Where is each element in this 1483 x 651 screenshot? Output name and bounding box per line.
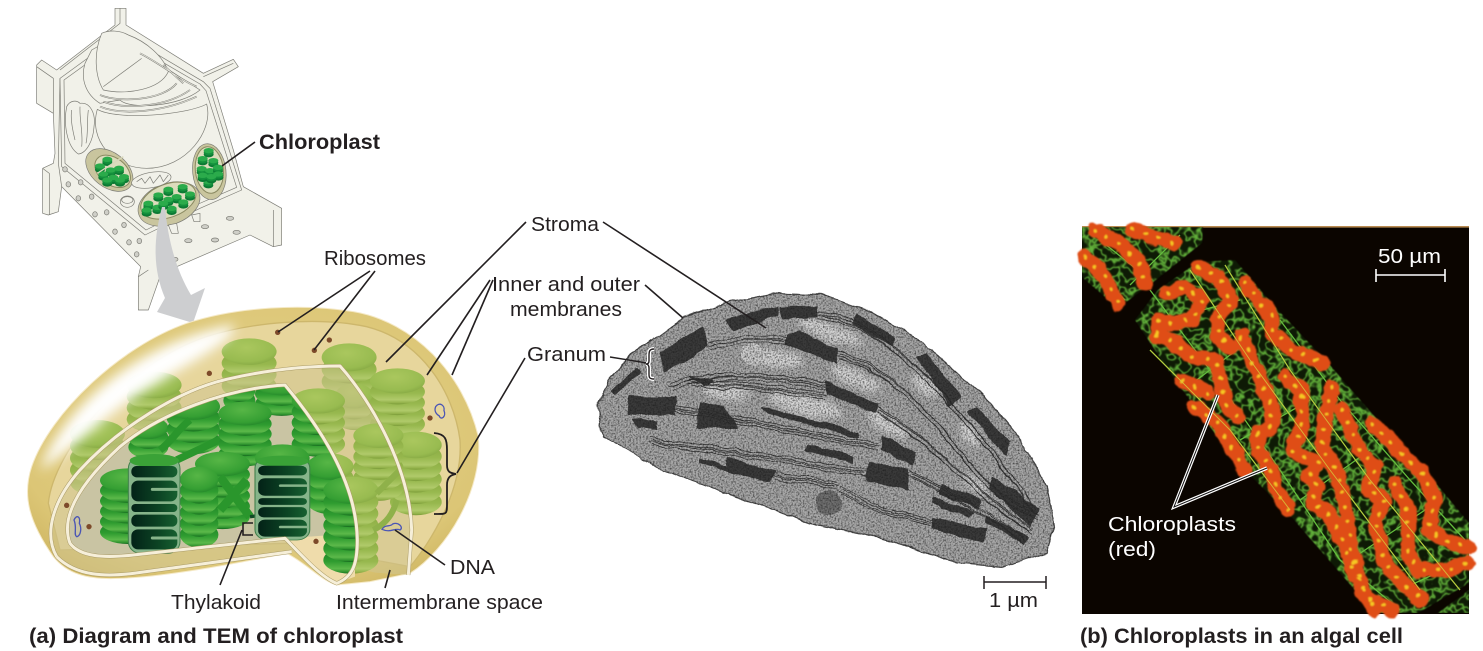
50 um scale bar bbox=[1376, 269, 1445, 282]
arrow: zoom into chloroplast bbox=[156, 207, 205, 323]
intermembrane space region bbox=[51, 366, 412, 575]
TEM body bbox=[597, 293, 1055, 567]
label: Stroma: Stroma bbox=[531, 213, 600, 236]
micrograph: TEM of chloroplast bbox=[597, 293, 1055, 567]
membrane bands bbox=[51, 366, 412, 583]
label: Chloroplasts (red): (red) bbox=[1108, 538, 1156, 561]
plasmodesmata bbox=[63, 167, 240, 261]
callout lines: chloroplasts bbox=[1174, 395, 1267, 507]
cut wedge wall bbox=[285, 533, 355, 583]
label: 50 um: 50 µm bbox=[1378, 245, 1441, 268]
1 um scale bar bbox=[984, 576, 1046, 589]
ribosomes bbox=[64, 330, 433, 544]
label: Thylakoid: Thylakoid bbox=[171, 591, 261, 614]
stroma bbox=[48, 321, 460, 567]
grana bbox=[613, 307, 1038, 542]
chloroplast right in cell bbox=[190, 142, 229, 201]
cut thylakoid stack left bbox=[128, 454, 180, 553]
label: Chloroplasts (red) bbox=[1108, 513, 1236, 561]
caption a: (a) Diagram and TEM of chloroplast bbox=[29, 625, 403, 648]
diagram: chloroplast cutaway bbox=[28, 307, 479, 585]
red chloroplast ribbons bbox=[1085, 230, 1468, 610]
label: Inner and outer membranes: Inner and outer bbox=[492, 273, 640, 296]
filaments crossing ribbons bbox=[1150, 265, 1460, 590]
label: Ribosomes: Ribosomes bbox=[324, 247, 426, 270]
brace: granum in diagram bbox=[434, 433, 456, 514]
leader lines bbox=[220, 142, 766, 588]
caption b: (b) Chloroplasts in an algal cell bbox=[1080, 625, 1403, 648]
chloroplast bottom in cell bbox=[132, 174, 206, 234]
label: Inner and outer membranes bbox=[492, 273, 640, 321]
central vacuole bbox=[95, 104, 208, 168]
label: 1 um: 1 µm bbox=[989, 589, 1038, 612]
label: Inner and outer membranes: membranes bbox=[510, 298, 622, 321]
illustration: plant cell bbox=[37, 8, 282, 310]
nucleus bbox=[83, 31, 200, 112]
label: DNA: DNA bbox=[450, 556, 495, 579]
saturated grana inside cut bbox=[100, 370, 377, 574]
label: Granum: Granum bbox=[527, 343, 606, 366]
faded grana behind bbox=[70, 338, 425, 496]
brace: granum in TEM bbox=[610, 349, 654, 379]
mid grana bbox=[292, 388, 442, 574]
mitochondrion left bbox=[65, 101, 94, 154]
label: Chloroplasts (red): Chloroplasts bbox=[1108, 513, 1236, 536]
DNA bbox=[74, 404, 445, 537]
chloroplast left in cell bbox=[78, 140, 141, 200]
highlight bbox=[40, 325, 234, 470]
outer body bbox=[28, 307, 479, 585]
pale stroma patches bbox=[700, 313, 990, 498]
thylakoid membranes bbox=[648, 312, 1039, 544]
inner cut region bbox=[67, 385, 357, 583]
algal cell mesh bbox=[1082, 227, 1469, 613]
mitochondrion and small vesicle bbox=[120, 169, 200, 233]
micrograph: algal cell bbox=[1082, 226, 1469, 614]
label: Chloroplast: Chloroplast bbox=[259, 131, 380, 154]
label: Intermembrane space: Intermembrane space bbox=[336, 591, 543, 614]
cut thylakoid stack right bbox=[255, 444, 310, 540]
green filaments bbox=[1090, 235, 1465, 610]
